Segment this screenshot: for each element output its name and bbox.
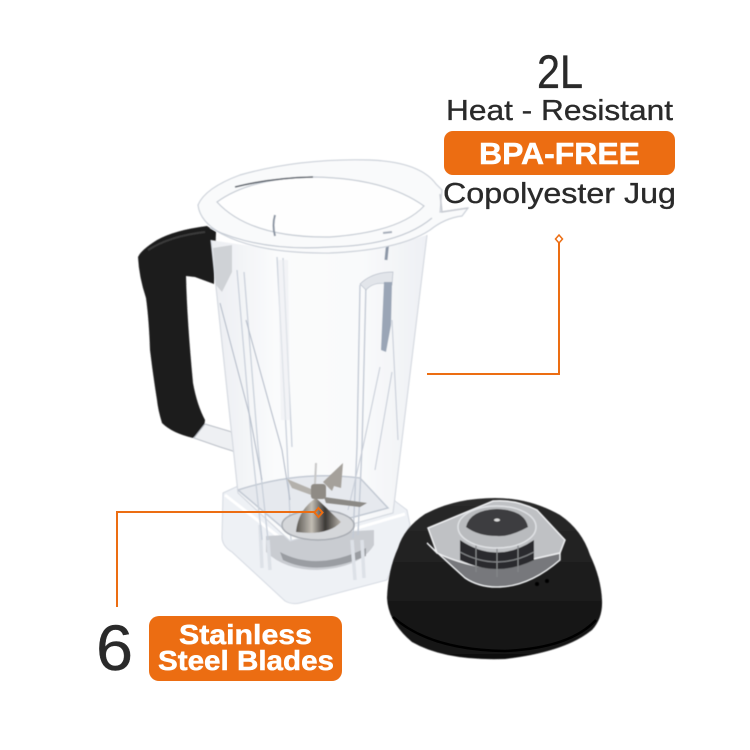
BPA-FREE badge: [444, 131, 675, 175]
jug base: [222, 475, 410, 604]
BPA-FREE badge: BPA-FREE: [479, 136, 640, 171]
lid black body: [387, 498, 602, 659]
Stainless Steel Blades badge: Stainless: [179, 619, 312, 650]
lid: [387, 498, 602, 659]
bottom leader arrow: [117, 508, 322, 607]
lid groove: [393, 617, 596, 651]
jug handle: [138, 226, 236, 452]
Heat - Resistant: Heat - Resistant: [446, 95, 673, 127]
Stainless Steel Blades badge: [149, 616, 342, 681]
Copolyester Jug: Copolyester Jug: [443, 178, 676, 210]
top leader arrow: [427, 235, 562, 374]
number 6: 6: [96, 612, 133, 684]
jug rim and spout: [198, 160, 468, 253]
blades: [282, 463, 367, 540]
2L: 2L: [537, 45, 583, 98]
top callout text: [443, 45, 676, 210]
jug body: [211, 235, 427, 541]
lid clear cap: [427, 501, 565, 587]
Stainless Steel Blades badge: Steel Blades: [158, 645, 334, 676]
